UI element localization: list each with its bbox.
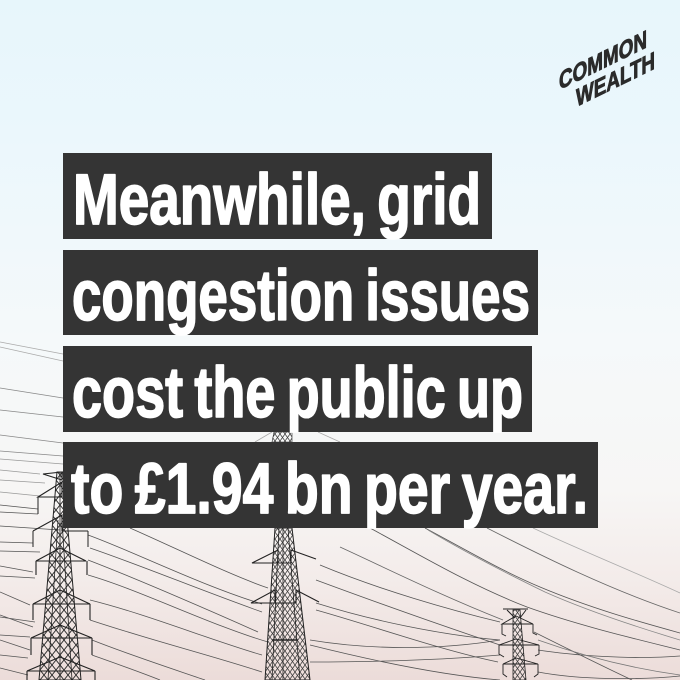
headline line 1: Meanwhile, grid [73, 161, 481, 240]
headline line 3: cost the public up [72, 354, 523, 433]
tower: centre pylon [251, 432, 319, 680]
logo: Common Wealth: COMMON [559, 24, 647, 96]
tower: right pylon [499, 609, 539, 680]
tower: left pylon [27, 472, 95, 680]
logo: Common Wealth [559, 24, 655, 113]
logo: Common Wealth: WEALTH [576, 46, 655, 113]
headline line 2: congestion issues [72, 257, 530, 336]
power lines [0, 342, 680, 680]
